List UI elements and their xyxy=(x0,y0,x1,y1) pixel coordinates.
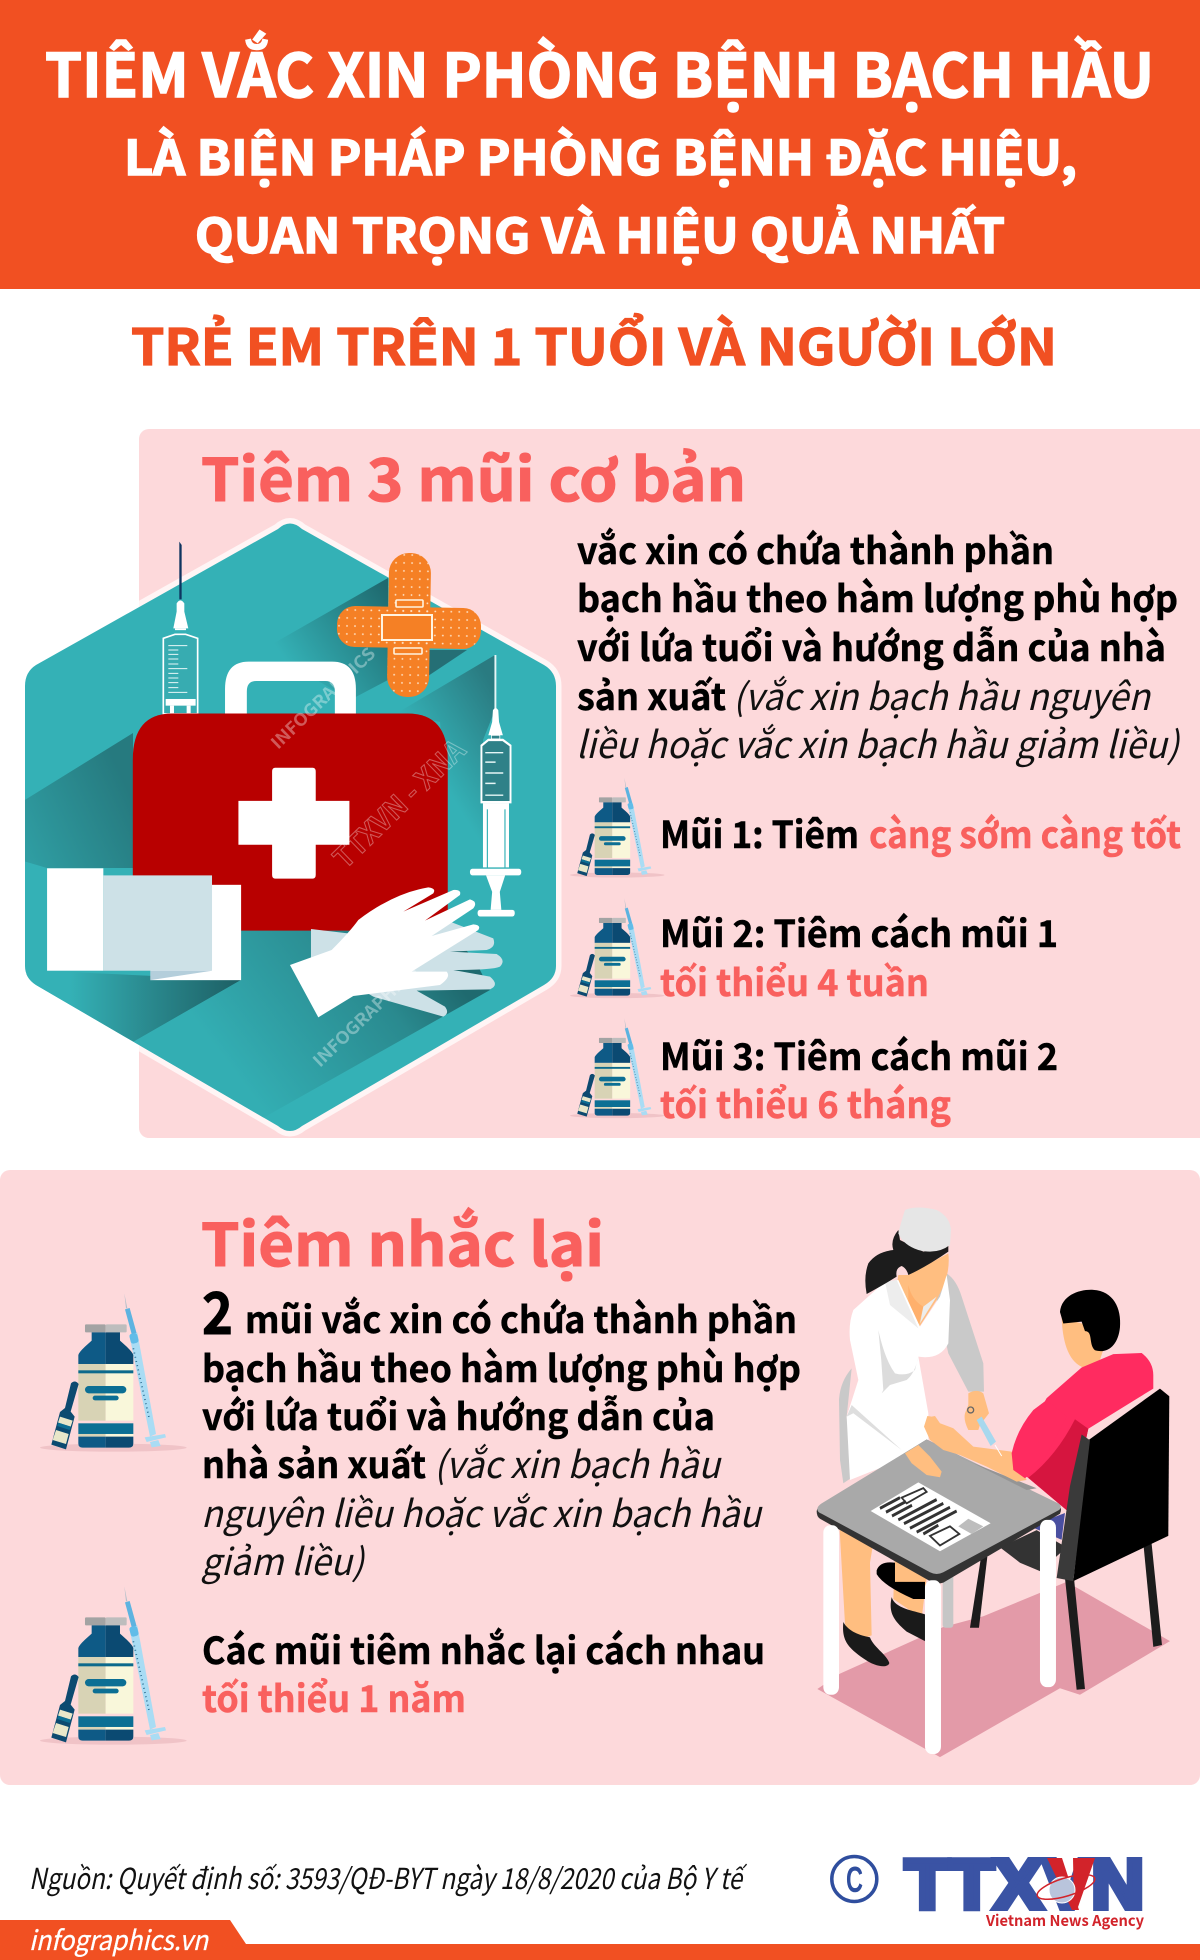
text: booster interval: tối thiểu 1 năm xyxy=(202,1669,466,1723)
text: dose 2 xyxy=(660,904,1058,1007)
icon: left syringe xyxy=(163,542,198,714)
text block: basic doses description: với lứa tuổi và hướng dẫn của nhà xyxy=(577,618,1166,672)
title line 3: QUAN TRỌNG VÀ HIỆU QUẢ NHẤT xyxy=(195,197,1005,267)
icon: first-aid kit case xyxy=(133,714,448,931)
text: dose 1: Mũi 1: Tiêm xyxy=(660,805,859,859)
text block: booster description: (vắc xin bạch hầu xyxy=(434,1435,722,1489)
text: dose 2: tối thiểu 4 tuần xyxy=(660,953,929,1007)
icon: bandage xyxy=(337,553,481,697)
copyright mark xyxy=(832,1856,877,1902)
icon: gauze pads xyxy=(47,868,241,980)
hexagon background xyxy=(25,524,556,1131)
text block: basic doses description: vắc xin có chứa thành phần xyxy=(577,521,1054,575)
arms, hands and syringe over the table xyxy=(905,1391,1067,1490)
panel: basic 3 doses xyxy=(139,429,1200,1138)
wordmark: TTXVN xyxy=(905,1845,1144,1923)
floor shadow xyxy=(817,1582,1170,1757)
watermarks: INFOGRAPHICS xyxy=(306,958,422,1072)
heading: Tiêm nhắc lại: Tiêm nhắc lại xyxy=(201,1198,604,1283)
illustration: nurse injecting patient xyxy=(817,1207,1170,1757)
document on table xyxy=(871,1482,991,1551)
illustration: first-aid hexagon xyxy=(20,524,556,1131)
patient legs xyxy=(1000,1530,1067,1571)
patient foot xyxy=(877,1562,925,1599)
logo: TTXVN xyxy=(832,1845,1144,1931)
text: dose 3 xyxy=(660,1027,1058,1129)
text block: booster description: nguyên liều hoặc vắc xin bạch hầu xyxy=(201,1484,763,1538)
icon: vial dose 2 xyxy=(570,898,665,998)
text block: basic doses description: sản xuất xyxy=(577,667,726,721)
agency name: Vietnam News Agency xyxy=(985,1910,1144,1931)
chair legs xyxy=(970,1534,1162,1690)
text: booster interval xyxy=(202,1621,765,1723)
title line 2: LÀ BIỆN PHÁP PHÒNG BỆNH ĐẶC HIỆU, xyxy=(124,119,1077,189)
nurse xyxy=(839,1207,984,1483)
source line: Nguồn: Quyết định số: 3593/QĐ-BYT ngày 18/8/2020 của Bộ Y tế xyxy=(29,1856,748,1898)
website: infographics.vn xyxy=(29,1919,209,1958)
chair back xyxy=(1057,1389,1169,1581)
watermarks: TTXVN - XNA xyxy=(323,729,474,876)
text block: basic doses description xyxy=(576,521,1180,769)
text: dose 1 xyxy=(660,805,1181,859)
icon: gloves xyxy=(290,887,503,1017)
text block: booster description xyxy=(201,1267,801,1586)
footer bar xyxy=(0,1919,1200,1960)
text: dose 2: Mũi 2: Tiêm cách mũi 1 xyxy=(660,904,1058,958)
text: booster interval: Các mũi tiêm nhắc lại cách nhau xyxy=(202,1621,765,1675)
watermarks: INFOGRAPHICS xyxy=(264,640,380,754)
table xyxy=(817,1439,1061,1754)
text: dose 3: tối thiểu 6 tháng xyxy=(660,1075,951,1129)
table back leg xyxy=(943,1570,953,1628)
icon: vial dose 1 xyxy=(570,778,665,878)
title line 1: TIÊM VẮC XIN PHÒNG BỆNH BẠCH HẦU xyxy=(45,28,1154,115)
text block: booster description: 2 xyxy=(202,1267,233,1351)
text block: booster description: nhà sản xuất xyxy=(202,1435,426,1489)
panel: booster xyxy=(0,1170,1200,1785)
text block: booster description: giảm liều) xyxy=(201,1532,365,1586)
text: dose 1: càng sớm càng tốt xyxy=(869,805,1181,859)
icon: vial dose 3 xyxy=(570,1018,665,1118)
watermarks xyxy=(264,640,474,1072)
text: dose 3: Mũi 3: Tiêm cách mũi 2 xyxy=(660,1027,1058,1081)
text block: basic doses description: bạch hầu theo hàm lượng phù hợp xyxy=(577,569,1178,623)
subtitle: TRẺ EM TRÊN 1 TUỔI VÀ NGƯỜI LỚN xyxy=(131,308,1057,380)
icon: vial booster 1 xyxy=(40,1293,187,1452)
text block: booster description: mũi vắc xin có chứa thành phần xyxy=(245,1290,797,1344)
text block: booster description: với lứa tuổi và hướng dẫn của xyxy=(202,1387,715,1441)
text block: basic doses description: (vắc xin bạch hầu nguyên xyxy=(733,667,1151,721)
patient xyxy=(1012,1290,1153,1513)
heading: Tiêm 3 mũi cơ bản: Tiêm 3 mũi cơ bản xyxy=(201,433,746,518)
icon: vial booster 2 xyxy=(40,1586,187,1745)
nurse legs and shoes xyxy=(839,1524,927,1666)
header banner xyxy=(0,0,1200,289)
text block: basic doses description: liều hoặc vắc xin bạch hầu giảm liều) xyxy=(576,715,1180,769)
copyright mark: C xyxy=(846,1859,863,1900)
icon: first-aid kit handle xyxy=(225,662,356,715)
text block: booster description: bạch hầu theo hàm lượng phù hợp xyxy=(202,1339,801,1393)
red V and globe xyxy=(1035,1858,1097,1910)
icon: right syringe xyxy=(470,655,521,916)
